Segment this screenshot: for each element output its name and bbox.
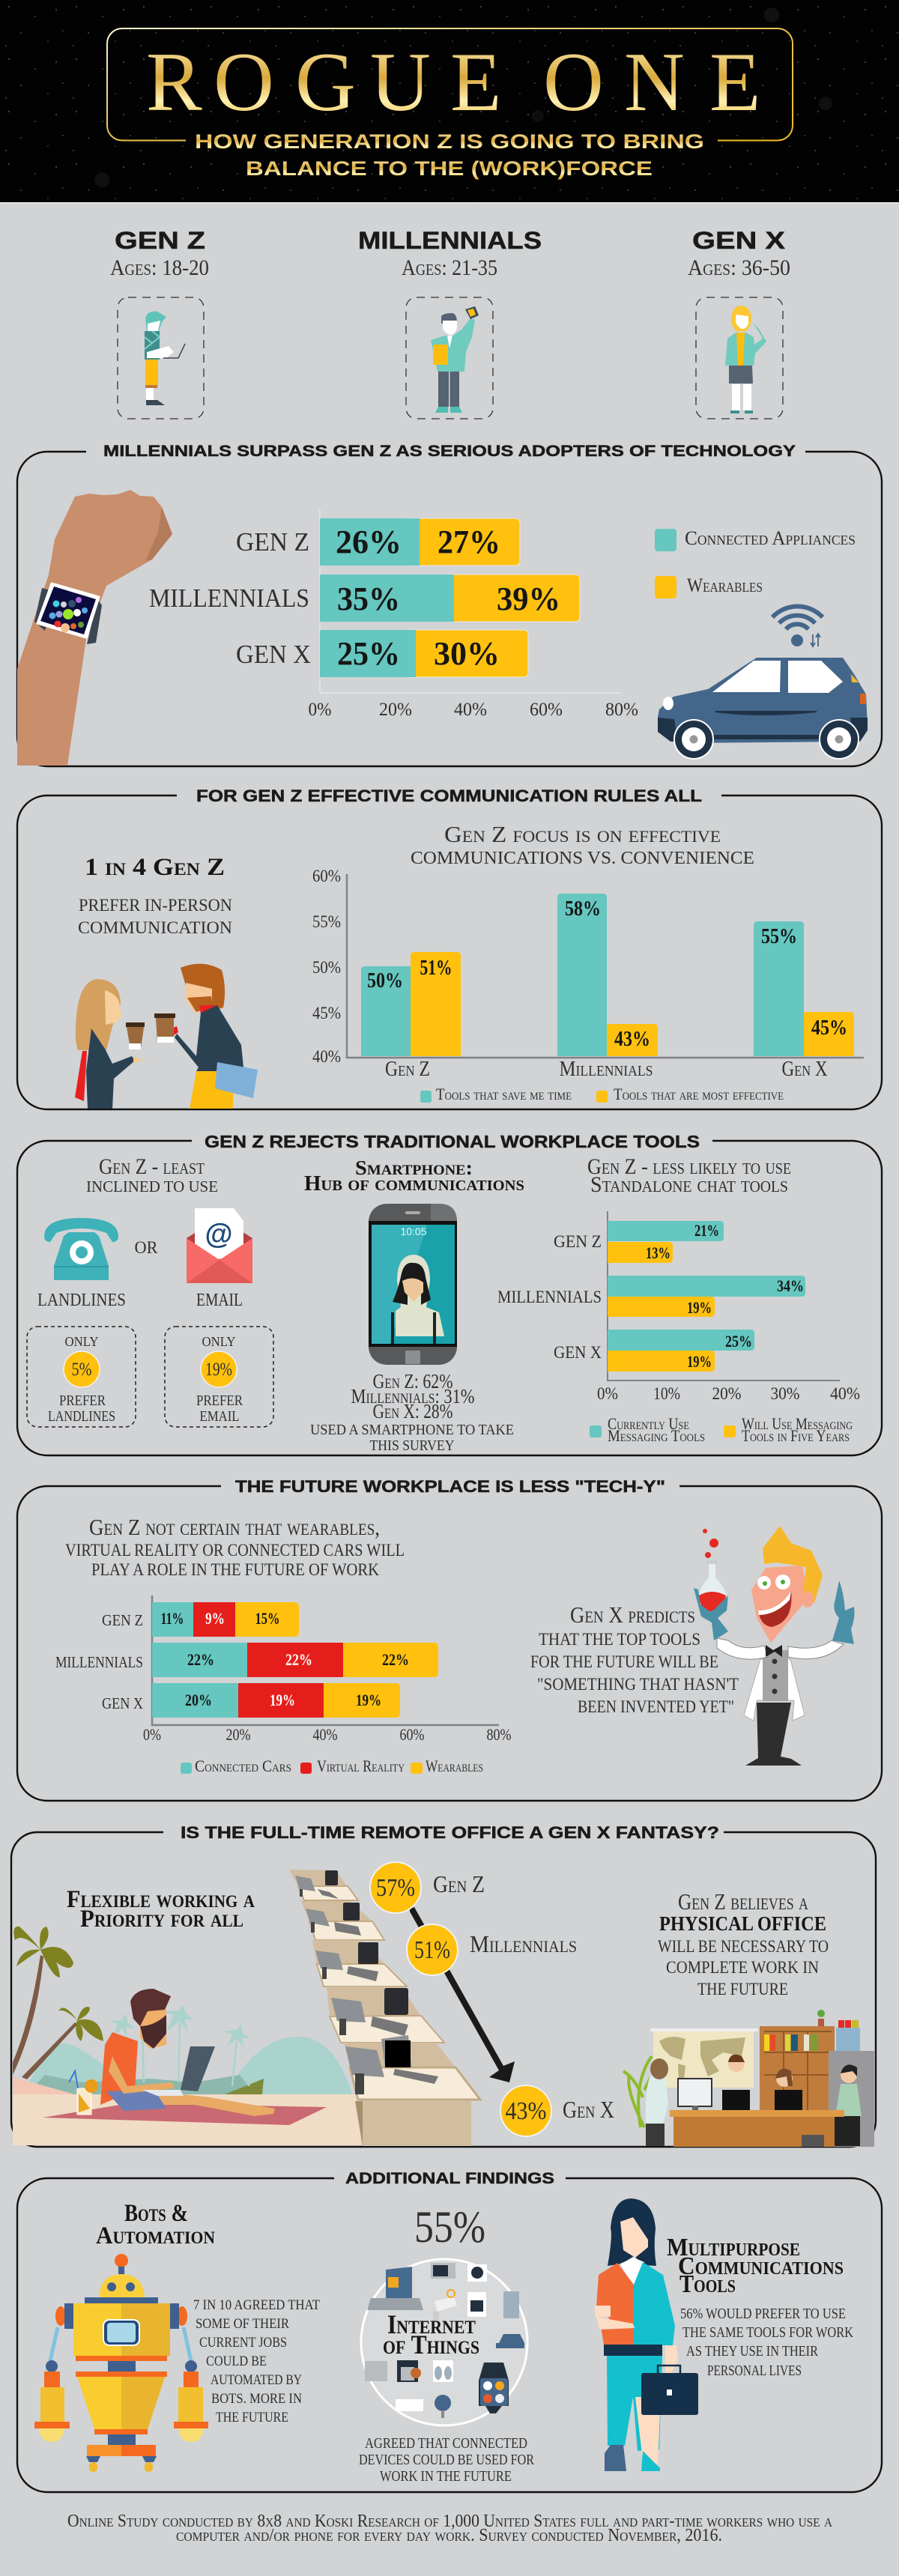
stacked bar chart: future tools: 0%	[143, 1725, 161, 1744]
illustration: descending desks	[289, 1870, 480, 2146]
heading: bots and automation: Bots &	[124, 2200, 188, 2227]
text: bots finding: 7 IN 10 AGREED THAT	[193, 2297, 320, 2313]
text: bots finding: THE FUTURE	[216, 2410, 288, 2425]
text: connected devices: DEVICES COULD BE USED FOR	[359, 2452, 535, 2468]
smartphone usage text: THIS SURVEY	[370, 1437, 454, 1454]
column chart: tools: Gen X	[782, 1058, 827, 1081]
bar chart: messaging tools: 19%	[687, 1298, 712, 1317]
intro text: PLAY A ROLE IN THE FUTURE OF WORK	[91, 1560, 379, 1579]
panel: additional findings	[17, 2170, 882, 2492]
laptop	[367, 2267, 423, 2310]
bar chart: messaging tools: MILLENNIALS	[497, 1288, 602, 1306]
header banner	[0, 0, 899, 204]
text: bots finding: AUTOMATED BY	[211, 2372, 302, 2388]
label: email: EMAIL	[196, 1291, 243, 1310]
text: bots finding: SOME OF THEIR	[196, 2316, 289, 2332]
bar chart: messaging tools	[497, 1211, 860, 1403]
man	[154, 964, 258, 1109]
stacked bar chart: future tools: MILLENNIALS	[55, 1653, 143, 1671]
quote: Gen X predicts: Gen X predicts	[570, 1601, 695, 1628]
generation: Gen Z	[110, 227, 209, 419]
center heading: Smartphone:	[355, 1157, 473, 1179]
bar chart: messaging tools: 34%	[777, 1276, 804, 1295]
heading: IS THE FULL-TIME REMOTE OFFICE A GEN X FANTASY?	[181, 1823, 719, 1842]
callout: prefer landlines: 5%	[72, 1360, 91, 1380]
stacked bar chart: future tools: 40%	[313, 1725, 337, 1744]
stacked bar chart: future tools: 80%	[487, 1725, 511, 1744]
icon: Gen Z person with laptop	[145, 312, 185, 405]
row: Gen X: 30%	[434, 635, 500, 672]
row: Gen X: GEN X	[236, 640, 311, 669]
icon: businesswoman with briefcase	[595, 2198, 698, 2471]
intro text: VIRTUAL REALITY OR CONNECTED CARS WILL	[65, 1541, 405, 1560]
left column heading	[86, 1154, 218, 1195]
quote: Gen X predicts: THAT THE TOP TOOLS	[539, 1630, 700, 1649]
icon: Millennial person with phone	[431, 306, 479, 413]
legend	[181, 1757, 483, 1775]
axis labels	[309, 700, 638, 720]
icon: email envelope: @	[205, 1219, 233, 1250]
legend: Virtual Reality	[317, 1757, 405, 1775]
callout: prefer landlines	[27, 1327, 136, 1427]
bar chart: messaging tools: 20%	[712, 1384, 742, 1403]
footer: study source: Online Study conducted by 8x8 and Koski Research of 1,000 United States full and part-time workers who use a	[67, 2512, 833, 2531]
legend: Currently Use	[608, 1414, 689, 1433]
text: physical office: THE FUTURE	[697, 1980, 788, 1998]
icon: Gen X person on phone	[725, 306, 766, 413]
left arm	[34, 2303, 73, 2442]
callout: prefer email	[165, 1327, 273, 1427]
text: physical office: Gen Z believes a	[678, 1888, 808, 1915]
heading: multipurpose tools	[667, 2234, 844, 2298]
generation: Millennials: Ages: 21-35	[402, 255, 497, 280]
panel frame	[17, 1141, 882, 1455]
column chart: tools: Gen Z	[385, 1058, 430, 1081]
bar chart: messaging tools: 40%	[830, 1384, 860, 1403]
palm trees	[13, 1927, 253, 2086]
flask in gloved hand	[694, 1529, 728, 1640]
bar chart: technology adoption	[149, 509, 638, 720]
stacked bar chart: future tools: GEN X	[102, 1694, 143, 1712]
footer: study source	[67, 2512, 833, 2545]
smartphone usage text: Millennials: 31%	[351, 1385, 475, 1407]
stat: Gen Z 57%: Gen Z	[433, 1870, 485, 1897]
generation: Gen X	[688, 227, 790, 419]
legend: Will Use Messaging	[742, 1414, 853, 1433]
generation: Gen Z: Ages: 18-20	[110, 255, 209, 280]
icon: connected car	[658, 607, 868, 759]
bar chart: messaging tools: GEN X	[554, 1343, 602, 1362]
intro text: Gen Z not certain that wearables,	[89, 1514, 380, 1540]
heading: multipurpose tools: Communications	[678, 2252, 844, 2280]
icon: arm with smart watch	[17, 490, 172, 766]
icon: scientist	[694, 1526, 854, 1766]
callout: prefer landlines: PREFER	[59, 1392, 106, 1409]
panel: traditional workplace tools	[17, 1132, 882, 1455]
quote: Gen X predicts: "SOMETHING THAT HASN'T	[537, 1675, 739, 1694]
title: ROGUE ONE	[146, 36, 760, 129]
heading: FOR GEN Z EFFECTIVE COMMUNICATION RULES ALL	[196, 787, 702, 805]
column chart: tools: 50%	[367, 969, 403, 992]
stat: Millennials 51%: 51%	[414, 1936, 450, 1964]
text: connected devices: WORK IN THE FUTURE	[380, 2468, 512, 2485]
title frame	[107, 28, 793, 141]
woman	[75, 979, 149, 1109]
axis labels: 40%	[454, 700, 487, 720]
text: multipurpose finding: 56% WOULD PREFER TO USE	[680, 2306, 846, 2322]
icon: internet of things circle	[361, 2259, 527, 2425]
column chart: tools: 40%	[312, 1047, 341, 1066]
smart watch	[479, 2363, 509, 2413]
row: Millennials: 39%	[497, 581, 560, 617]
icon: smartphone: 10:05	[400, 1225, 427, 1237]
quote: Gen X predicts: FOR THE FUTURE WILL BE	[530, 1652, 718, 1671]
stat: Gen X 43%: Gen X	[563, 2096, 614, 2123]
text: connected devices	[359, 2435, 535, 2485]
bar chart: messaging tools: 19%	[687, 1352, 712, 1371]
callout: 1 in 4 Gen Z: COMMUNICATION	[78, 918, 232, 937]
generation: Gen Z: GEN Z	[115, 227, 205, 254]
callout: prefer landlines: LANDLINES	[48, 1408, 115, 1425]
icon: robot	[34, 2254, 208, 2472]
right column heading: Standalone chat tools	[590, 1172, 788, 1197]
axis labels: 0%	[309, 700, 331, 720]
label: Internet	[387, 2309, 476, 2339]
subtitle	[195, 130, 704, 180]
illustration: man working on beach	[13, 1927, 361, 2145]
stacked bar chart: future tools: GEN Z	[102, 1611, 143, 1629]
heading: MILLENNIALS SURPASS GEN Z AS SERIOUS ADOPTERS OF TECHNOLOGY	[103, 443, 796, 460]
callout: prefer email: 19%	[205, 1360, 232, 1380]
man with laptop	[100, 1989, 275, 2116]
text: connected devices: AGREED THAT CONNECTED	[365, 2435, 527, 2452]
left column heading: INCLINED TO USE	[86, 1178, 218, 1195]
stacked bar chart: future tools: 60%	[400, 1725, 424, 1744]
callout: prefer email: PREFER	[196, 1392, 243, 1409]
row: Gen Z: GEN Z	[236, 527, 309, 557]
label	[383, 2309, 479, 2360]
center heading	[304, 1157, 524, 1195]
callout: 1 in 4 Gen Z: PREFER IN-PERSON	[79, 896, 232, 915]
panel: remote office	[11, 1823, 876, 2147]
legend	[590, 1414, 853, 1445]
label: of Things	[383, 2330, 479, 2360]
stacked bar chart: future tools: 9%	[205, 1609, 225, 1628]
panel: future workplace	[17, 1477, 882, 1801]
panel frame	[17, 1486, 882, 1801]
bar chart: messaging tools: 30%	[770, 1384, 800, 1403]
appliances	[365, 2263, 524, 2418]
heading: multipurpose tools: Multipurpose	[667, 2234, 800, 2261]
row: Gen Z: 26%	[336, 524, 402, 560]
row: Millennials: MILLENNIALS	[149, 584, 309, 613]
stat: Millennials 51%	[407, 1924, 577, 1975]
stat: 55%: 55%	[414, 2202, 485, 2252]
heading: flexible working: Flexible working a	[67, 1886, 255, 1913]
callout: prefer landlines: ONLY	[64, 1334, 99, 1349]
stacked bar chart: future tools: 19%	[270, 1691, 295, 1709]
bar chart: messaging tools: 0%	[597, 1384, 618, 1403]
bar chart: messaging tools: 21%	[694, 1221, 719, 1240]
legend: Tools that are most effective	[614, 1085, 784, 1103]
generation: Millennials: MILLENNIALS	[358, 227, 542, 254]
drink	[69, 2071, 98, 2115]
column chart: tools: Millennials	[559, 1058, 653, 1081]
column chart: tools: 43%	[614, 1028, 650, 1051]
right arm	[170, 2303, 208, 2442]
axis labels: 80%	[605, 700, 638, 720]
text: or: OR	[135, 1238, 158, 1257]
column chart: tools: 58%	[565, 897, 601, 921]
icon: two people talking over coffee	[75, 964, 258, 1109]
text: multipurpose finding	[680, 2306, 853, 2379]
text: multipurpose finding: THE SAME TOOLS FOR WORK	[682, 2324, 853, 2341]
callout: 1 in 4 Gen Z	[78, 854, 232, 937]
text: bots finding: BOTS. MORE IN	[211, 2391, 302, 2407]
legend	[420, 1085, 784, 1103]
column chart: tools: 55%	[761, 925, 797, 948]
panel: technology adopters	[17, 443, 882, 766]
stacked bar chart: future tools: 22%	[382, 1650, 409, 1669]
text: bots finding	[193, 2297, 320, 2425]
generation: Millennials	[358, 227, 542, 419]
illustration: office	[623, 2010, 874, 2147]
callout: prefer email: ONLY	[202, 1334, 235, 1349]
stacked bar chart: future tools: 22%	[187, 1650, 214, 1669]
subtitle: HOW GENERATION Z IS GOING TO BRING	[195, 130, 704, 153]
heading: ADDITIONAL FINDINGS	[345, 2170, 554, 2187]
column chart: tools: 55%	[312, 912, 341, 931]
column chart: tools: 50%	[312, 958, 341, 977]
stacked bar chart: future tools	[55, 1595, 511, 1744]
text: multipurpose finding: AS THEY USE IN THEIR	[686, 2343, 819, 2360]
column chart: tools	[312, 867, 864, 1081]
column chart: tools: 45%	[811, 1016, 847, 1040]
generation: Gen X: Ages: 36-50	[688, 255, 790, 280]
smartphone usage text	[310, 1370, 514, 1454]
stacked bar chart: future tools: 15%	[255, 1609, 280, 1628]
legend: Tools that save me time	[436, 1085, 572, 1103]
stacked bar chart: future tools: 19%	[356, 1691, 381, 1709]
text: physical office: WILL BE NECESSARY TO	[658, 1937, 829, 1956]
icon: landline telephone	[44, 1218, 118, 1280]
subtitle: BALANCE TO THE (WORK)FORCE	[246, 157, 653, 180]
heading: flexible working	[67, 1886, 255, 1933]
chart title: COMMUNICATIONS VS. CONVENIENCE	[411, 849, 754, 868]
footer: study source: computer and/or phone for every day work. Survey conducted November, 2016.	[176, 2526, 722, 2545]
legend: Wearables	[687, 575, 763, 596]
axis labels: 20%	[379, 700, 412, 720]
row: Gen Z	[236, 518, 520, 566]
stat: Gen Z 57%: 57%	[376, 1874, 415, 1902]
bar chart: messaging tools: 10%	[653, 1384, 680, 1403]
column chart: tools: 51%	[420, 957, 452, 980]
smartphone usage text: USED A SMARTPHONE TO TAKE	[310, 1422, 514, 1438]
stacked bar chart: future tools: 20%	[185, 1691, 212, 1709]
chart title	[411, 821, 754, 868]
panel frame	[11, 1832, 876, 2147]
row: Gen X	[236, 630, 528, 677]
callout: 1 in 4 Gen Z: 1 in 4 Gen Z	[85, 854, 225, 881]
heading: multipurpose tools: Tools	[679, 2270, 736, 2298]
column chart: tools: 60%	[312, 867, 341, 885]
stat: Gen Z 57%	[370, 1862, 485, 1913]
row: Millennials	[149, 575, 580, 622]
legend: Connected Appliances	[685, 527, 856, 549]
intro text	[65, 1514, 405, 1579]
label: landlines: LANDLINES	[37, 1291, 126, 1310]
legend: Connected Cars	[195, 1757, 291, 1775]
legend: Messaging Tools	[608, 1426, 705, 1445]
heading: THE FUTURE WORKPLACE IS LESS "TECH-Y"	[235, 1477, 665, 1496]
row: Gen X: 25%	[337, 635, 400, 672]
row: Gen Z: 27%	[438, 524, 500, 560]
stacked bar chart: future tools: 22%	[285, 1650, 312, 1669]
callout: prefer email: EMAIL	[199, 1408, 240, 1425]
legend	[655, 527, 856, 598]
heading: bots and automation: Automation	[96, 2222, 215, 2249]
legend: Wearables	[426, 1757, 483, 1775]
legend: Tools in Five Years	[742, 1426, 850, 1445]
quote: Gen X predicts	[530, 1601, 739, 1716]
generations row	[110, 227, 790, 419]
stat: Gen X 43%: 43%	[505, 2097, 547, 2125]
bar chart: messaging tools: 13%	[646, 1243, 671, 1262]
stat: Millennials 51%: Millennials	[470, 1930, 577, 1957]
text: bots finding: CURRENT JOBS	[199, 2335, 287, 2351]
right column heading	[587, 1154, 791, 1197]
stacked bar chart: future tools: 11%	[160, 1609, 184, 1628]
panel frame	[17, 452, 882, 766]
icon: email envelope	[187, 1208, 252, 1283]
stacked bar chart: future tools: 20%	[226, 1725, 250, 1744]
center heading: Hub of communications	[304, 1172, 524, 1195]
arrow: declining percentages	[410, 1907, 515, 2082]
right column heading: Gen Z - less likely to use	[587, 1154, 791, 1179]
bar chart: messaging tools: GEN Z	[554, 1232, 602, 1251]
row: Millennials: 35%	[337, 581, 400, 617]
text: physical office: COMPLETE WORK IN	[666, 1958, 819, 1977]
chart title: Gen Z focus is on effective	[444, 821, 721, 847]
left column heading: Gen Z - least	[99, 1154, 205, 1179]
generation: Gen X: GEN X	[692, 227, 786, 254]
text: bots finding: COULD BE	[206, 2354, 267, 2369]
stat: Gen X 43%	[500, 2085, 614, 2136]
smartphone usage text: Gen Z: 62%	[373, 1370, 452, 1392]
heading: flexible working: Priority for all	[80, 1906, 243, 1933]
axis labels: 60%	[530, 700, 563, 720]
text: physical office: PHYSICAL OFFICE	[659, 1912, 826, 1935]
text: multipurpose finding: PERSONAL LIVES	[707, 2363, 802, 2379]
heading: GEN Z REJECTS TRADITIONAL WORKPLACE TOOLS	[205, 1132, 700, 1151]
quote: Gen X predicts: BEEN INVENTED YET"	[578, 1697, 734, 1716]
column chart: tools: 45%	[312, 1004, 341, 1022]
panel frame	[17, 2178, 882, 2492]
heading: bots and automation	[96, 2200, 215, 2249]
panel frame	[17, 795, 882, 1109]
icon: smartphone	[369, 1204, 457, 1365]
mat	[43, 2103, 327, 2125]
panel: effective communication	[17, 787, 882, 1109]
text: physical office	[658, 1888, 829, 1998]
smartphone usage text: Gen X: 28%	[373, 1400, 452, 1422]
bar chart: messaging tools: 25%	[725, 1332, 752, 1351]
